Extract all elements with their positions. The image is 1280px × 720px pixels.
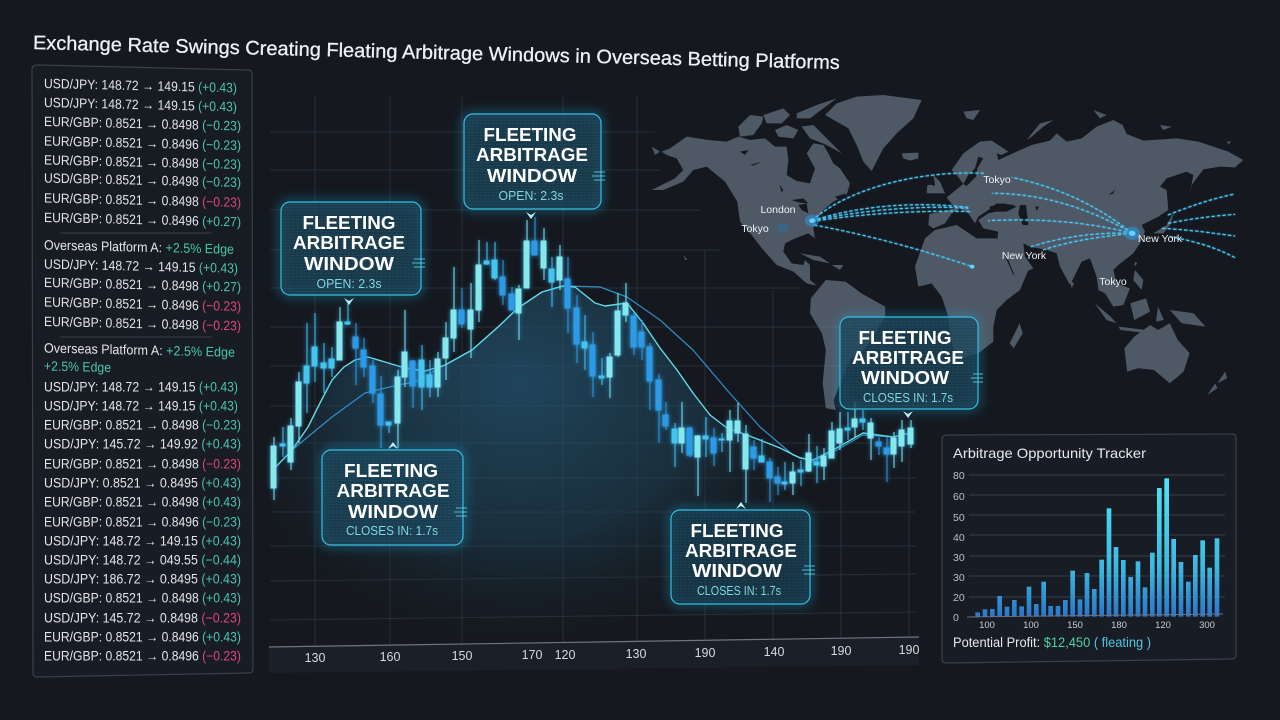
panel: arbitrage opportunity tracker bbox=[942, 434, 1236, 663]
lower rows: USD/JPY: 148.72 → 149.15 (+0.43) bbox=[44, 398, 238, 414]
callout: closes in lower centre: ARBITRAGE bbox=[685, 541, 797, 561]
x axis labels: 120 bbox=[1155, 620, 1171, 631]
upper rows: EUR/GBP: 0.8521 → 0.8496 (+0.27) bbox=[44, 210, 241, 229]
upper rows bbox=[44, 76, 241, 378]
upper rows: EUR/GBP: 0.8521 → 0.8496 (−0.23) bbox=[44, 134, 241, 153]
upper rows: EUR/GBP: 0.8521 → 0.8498 (−0.23) bbox=[44, 191, 241, 210]
network arcs bbox=[812, 173, 1235, 267]
map city labels: Tokyo bbox=[1099, 276, 1127, 288]
callout: window open top: ARBITRAGE bbox=[476, 145, 588, 165]
candles bbox=[271, 217, 913, 503]
map city labels: New York bbox=[1138, 233, 1183, 245]
y axis labels: 40 bbox=[953, 532, 965, 544]
callout: window open left bbox=[281, 202, 425, 305]
y axis labels: 30 bbox=[953, 572, 965, 584]
axis labels: 120 bbox=[555, 648, 575, 662]
lower rows: EUR/GBP: 0.8521 → 0.8498 (−0.23) bbox=[44, 418, 241, 432]
upper rows: Overseas Platform A: +2.5% Edge bbox=[44, 341, 235, 360]
callout: window open left: WINDOW bbox=[304, 254, 394, 274]
upper rows: USD/GBP: 0.8521 → 0.8498 (−0.23) bbox=[44, 171, 241, 190]
lower rows: EUR/GBP: 0.8521 → 0.8496 (−0.23) bbox=[44, 648, 241, 664]
x axis labels: 150 bbox=[1067, 620, 1083, 631]
lower rows: EUR/GBP: 0.8521 → 0.8496 (+0.43) bbox=[44, 630, 241, 644]
lower rows: EUR/GBP: 0.8521 → 0.8496 (−0.23) bbox=[44, 514, 241, 530]
upper rows: USD/JPY: 148.72 → 149.15 (+0.43) bbox=[44, 95, 237, 114]
callout: closes in lower left: ARBITRAGE bbox=[336, 481, 450, 501]
callout: closes in right bbox=[840, 317, 983, 418]
axis band bbox=[269, 637, 919, 673]
axis labels: 190 bbox=[695, 646, 715, 660]
callout: closes in lower left: FLEETING bbox=[344, 461, 438, 481]
x axis labels: 300 bbox=[1199, 620, 1215, 631]
area under trend line bbox=[272, 286, 910, 648]
axis labels: 150 bbox=[452, 649, 472, 663]
axis labels: 190 bbox=[831, 644, 851, 658]
map city labels bbox=[741, 174, 1183, 288]
potential profit: Potential Profit: $12,450 ( fleating ) bbox=[953, 635, 1151, 650]
bar chart bbox=[967, 475, 1225, 617]
y axis labels: 20 bbox=[953, 592, 965, 604]
trend line: slow bbox=[272, 286, 910, 471]
callout: window open top: OPEN: 2.3s bbox=[498, 189, 564, 203]
axis labels: 170 bbox=[522, 648, 542, 662]
y axis labels: 0 bbox=[953, 612, 959, 624]
upper rows: EUR/GBP: 0.8521 → 0.8498 (−0.23) bbox=[44, 314, 241, 333]
lower rows: EUR/GBP: 0.8521 → 0.8498 (−0.23) bbox=[44, 456, 241, 472]
callout: closes in lower left: CLOSES IN: 1.7s bbox=[346, 524, 438, 538]
upper rows: EUR/GBP: 0.8521 → 0.8496 (−0.23) bbox=[44, 295, 241, 314]
callout: window open left: ARBITRAGE bbox=[293, 233, 405, 253]
x axis labels bbox=[979, 620, 1215, 631]
callout: window open left: OPEN: 2.3s bbox=[316, 277, 382, 291]
axis labels: 130 bbox=[626, 647, 646, 661]
lower rows: USD/GBP: 0.8521 → 0.8498 (+0.43) bbox=[44, 590, 241, 606]
callout: closes in lower centre: FLEETING bbox=[690, 521, 784, 541]
lower rows: USD/JPY: 148.72 → 049.55 (−0.44) bbox=[44, 552, 241, 568]
callout: window open top: FLEETING bbox=[484, 125, 576, 145]
axis labels: 140 bbox=[764, 645, 784, 659]
upper rows: USD/JPY: 148.72 → 149.15 (+0.43) bbox=[44, 257, 238, 276]
map city labels: Tokyo bbox=[983, 174, 1011, 186]
y axis labels: 50 bbox=[953, 512, 965, 524]
tracker heading: Arbitrage Opportunity Tracker bbox=[953, 445, 1146, 461]
lower rows: USD/JPY: 0.8521 → 0.8495 (+0.43) bbox=[44, 476, 241, 490]
lower rows: USD/JPY: 186.72 → 0.8495 (+0.43) bbox=[44, 572, 241, 586]
lower rows: EUR/GBP: 0.8521 → 0.8498 (+0.43) bbox=[44, 494, 241, 510]
upper rows: EUR/GBP: 0.8521 → 0.8498 (−0.23) bbox=[44, 153, 241, 172]
callout: window open top: WINDOW bbox=[487, 166, 577, 186]
axis labels: 160 bbox=[380, 650, 400, 664]
candlestick chart bbox=[269, 95, 919, 673]
upper rows: EUR/GBP: 0.8521 → 0.8498 (+0.27) bbox=[44, 275, 241, 294]
upper rows: EUR/GBP: 0.8521 → 0.8498 (−0.23) bbox=[44, 114, 241, 133]
callout: closes in lower centre: WINDOW bbox=[692, 561, 782, 581]
callout: closes in lower left bbox=[322, 442, 467, 545]
callout: closes in lower centre bbox=[671, 502, 815, 604]
callout: closes in right: WINDOW bbox=[861, 368, 949, 388]
callout: closes in right: ARBITRAGE bbox=[852, 348, 964, 368]
y axis labels: 80 bbox=[953, 470, 965, 482]
callout: closes in right: FLEETING bbox=[858, 328, 952, 348]
axis labels: 190 bbox=[899, 643, 919, 657]
lower rows bbox=[44, 380, 241, 664]
axis labels bbox=[305, 643, 919, 665]
map city labels: Tokyo bbox=[741, 223, 769, 235]
y axis labels bbox=[953, 470, 965, 624]
lower rows: USD/JPY: 145.72 → 0.8498 (−0.23) bbox=[44, 610, 241, 626]
x axis labels: 180 bbox=[1111, 620, 1127, 631]
callout: closes in lower centre: CLOSES IN: 1.7s bbox=[697, 584, 781, 598]
lower rows: USD/JPY: 148.72 → 149.15 (+0.43) bbox=[44, 380, 238, 394]
trend line: fast bbox=[272, 286, 910, 471]
south america, australia and islands bbox=[776, 173, 1235, 410]
callout: window open top bbox=[464, 114, 605, 219]
panel: rate ticker bbox=[32, 65, 253, 677]
axis labels: 130 bbox=[305, 651, 325, 665]
network hubs bbox=[776, 215, 1140, 269]
upper rows: +2.5% Edge bbox=[44, 359, 111, 375]
y axis labels: 30 bbox=[953, 552, 965, 564]
world map bbox=[652, 95, 1243, 410]
eurasia and africa bbox=[902, 110, 1243, 358]
callout: closes in right: CLOSES IN: 1.7s bbox=[863, 391, 953, 405]
x axis labels: 100 bbox=[979, 620, 995, 631]
x axis labels: 100 bbox=[1023, 620, 1039, 631]
upper rows: USD/JPY: 148.72 → 149.15 (+0.43) bbox=[44, 76, 237, 95]
map city labels: New York bbox=[1002, 250, 1047, 262]
y axis labels: 60 bbox=[953, 491, 965, 503]
callout: closes in lower left: WINDOW bbox=[348, 502, 438, 522]
north america and greenland bbox=[652, 95, 922, 286]
lower rows: USD/JPY: 148.72 → 149.15 (+0.43) bbox=[44, 534, 241, 548]
upper rows: Overseas Platform A: +2.5% Edge bbox=[44, 238, 234, 257]
map city labels: London bbox=[760, 204, 796, 216]
lower rows: USD/JPY: 145.72 → 149.92 (+0.43) bbox=[44, 436, 241, 452]
title: Exchange Rate Swings Creating Fleating Arbitrage Windows in Overseas Betting Platforms bbox=[33, 32, 840, 74]
callout: window open left: FLEETING bbox=[302, 213, 396, 233]
